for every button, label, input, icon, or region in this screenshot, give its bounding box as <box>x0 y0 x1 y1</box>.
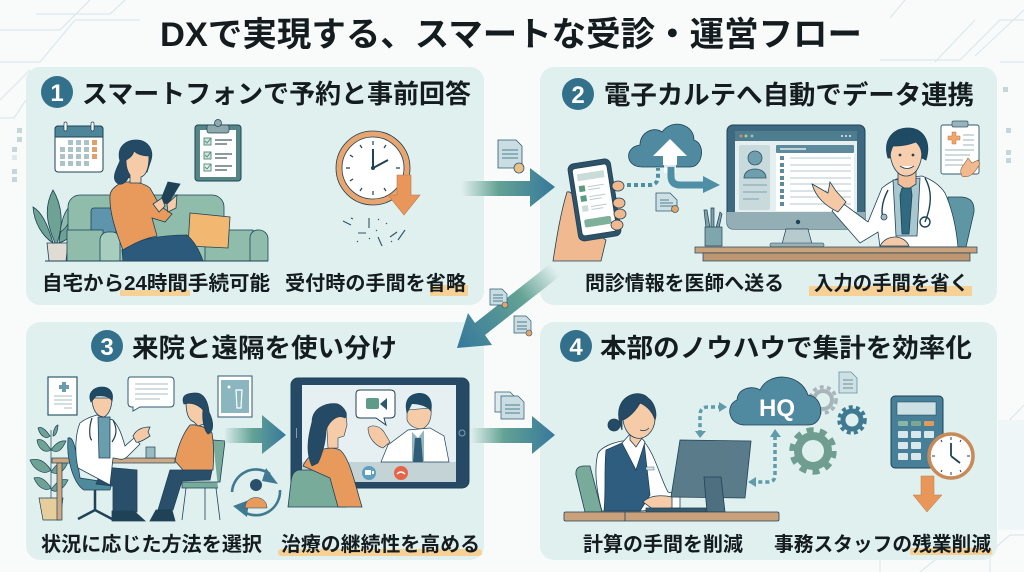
caption: send interview: 問診情報を医師へ送る <box>585 272 784 295</box>
step number 4: 4 <box>569 334 583 361</box>
illustration: monitor with patient record <box>727 125 865 247</box>
caption: reduce calculation: 計算の手間を削減 <box>583 532 743 556</box>
icon: wall picture <box>218 376 252 417</box>
illustration: sofa <box>45 195 268 261</box>
illustration: computer monitor <box>564 440 779 521</box>
icon: gears <box>792 387 865 472</box>
panel: step 1 smartphone booking <box>26 67 484 305</box>
illustration: patient seated <box>150 393 225 521</box>
illustration: office worker at computer <box>576 394 680 512</box>
title: DXで実現する、スマートな受診・運営フロー <box>160 16 862 54</box>
icon: clock <box>929 434 973 478</box>
icon: cloud upload <box>627 124 720 193</box>
step number 3: 3 <box>100 334 114 361</box>
icon: wall certificate <box>48 377 77 415</box>
caption: continuity: 治療の継続性を高める <box>281 533 480 556</box>
icon: clipboard checklist <box>195 120 241 181</box>
panel: step 2 EMR data link <box>540 67 997 305</box>
icon: doc with clock 2 <box>490 289 508 308</box>
arrow: step 2 to step 3 <box>457 264 560 348</box>
caption: home 24 hours: 自宅から24時間手続可能 <box>42 272 270 295</box>
caption: reduce overtime: 事務スタッフの残業削減 <box>774 532 991 556</box>
step number 2: 2 <box>571 82 585 109</box>
heading: step 1: スマートフォンで予約と事前回答 <box>82 79 471 109</box>
step number 3 <box>91 330 123 362</box>
panel: step 4 HQ know-how <box>540 322 997 560</box>
illustration: woman with phone <box>110 140 203 261</box>
step number 4 <box>560 330 592 362</box>
icon: stacked docs <box>495 392 524 419</box>
icon: calculator <box>891 396 943 468</box>
icon: doc with clock 1 <box>498 140 524 173</box>
step number 1: 1 <box>50 80 64 107</box>
icon: medical clipboard <box>941 121 980 177</box>
illustration: tablet video call <box>288 378 469 507</box>
illustration: plant <box>33 190 79 261</box>
arrow: step 1 to step 2 <box>461 168 555 207</box>
arrow: in-person to remote <box>225 415 286 454</box>
arrow heads <box>695 402 781 487</box>
icon: rotate person <box>232 468 280 517</box>
illustration: plant <box>30 425 68 520</box>
arrow: step 3 to step 4 <box>470 416 555 454</box>
illustration: doctor seated <box>68 387 150 521</box>
illustration: hand holding phone <box>553 158 626 261</box>
heading: step 2: 電子カルテへ自動でデータ連携 <box>604 80 974 110</box>
illustration: desk <box>695 247 977 261</box>
illustration: doctor pointing <box>812 128 974 247</box>
icon: clock with down arrow <box>336 131 420 246</box>
caption: reception: 受付時の手間を省略 <box>285 271 466 295</box>
icon: document <box>839 372 857 393</box>
illustration: pen holder <box>704 208 722 246</box>
caption highlight <box>809 286 972 296</box>
icon: doc with clock 3 <box>514 316 532 336</box>
icon: document with clock <box>656 193 678 212</box>
step number 1 <box>41 76 73 108</box>
icon: orange down arrow <box>913 476 942 512</box>
panel: step 3 visit and remote <box>26 322 484 560</box>
caption highlights <box>120 285 468 296</box>
icon: calendar <box>55 122 103 172</box>
illustration: table <box>52 447 175 520</box>
arrow: dotted sync up <box>700 407 775 482</box>
icon: HQ cloud: HQ <box>759 395 795 422</box>
heading: step 3: 来院と遠隔を使い分け <box>132 333 397 363</box>
caption: choose method: 状況に応じた方法を選択 <box>41 533 262 556</box>
caption highlight <box>910 548 992 555</box>
heading: step 4: 本部のノウハウで集計を効率化 <box>600 333 972 363</box>
caption highlight <box>278 549 482 556</box>
icon: HQ cloud <box>730 377 821 425</box>
caption: saves typing: 入力の手間を省く <box>814 272 969 295</box>
step number 2 <box>562 78 594 110</box>
icon: speech bubble <box>128 377 174 411</box>
